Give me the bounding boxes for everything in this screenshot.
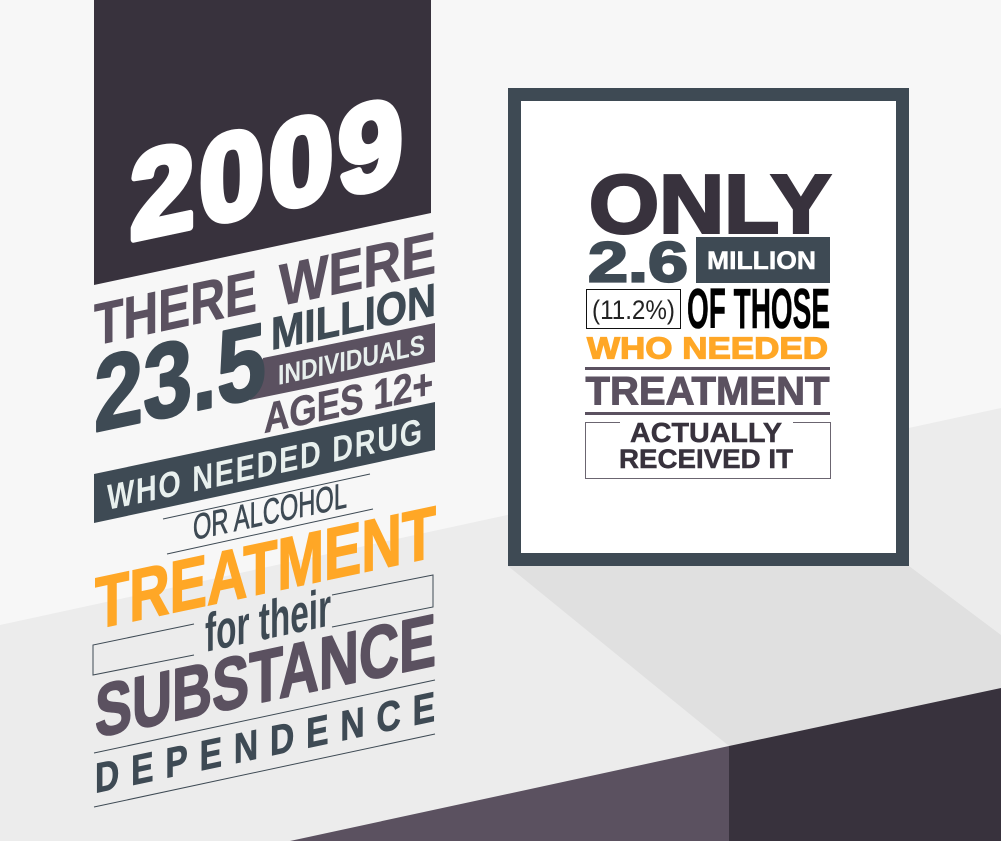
23.5 figure: 23.5 <box>94 300 266 455</box>
or alcohol: OR ALCOHOL <box>193 475 347 548</box>
individuals band <box>250 323 435 400</box>
dependence rules <box>94 680 435 807</box>
background: lower floor <box>0 408 1001 841</box>
for their outline box <box>93 575 433 675</box>
only: ONLY <box>589 158 831 250</box>
dark banner <box>94 0 431 285</box>
or alcohol rules <box>163 474 373 554</box>
there: THERE <box>94 257 257 358</box>
who needed drug band <box>94 402 435 523</box>
actually: ACTUALLY <box>630 417 782 448</box>
were: WERE <box>279 219 436 319</box>
for their: for their <box>205 577 331 664</box>
floor block: purple <box>290 746 729 841</box>
2.6: 2.6 <box>588 230 688 294</box>
frame <box>514 94 902 560</box>
individuals: INDIVIDUALS <box>278 328 425 391</box>
actually received box <box>586 422 830 478</box>
right panel: framed statistic <box>514 94 902 560</box>
substance: SUBSTANCE <box>95 598 436 753</box>
left panel: 2009 statistic <box>93 0 436 807</box>
million label: MILLION <box>707 247 816 275</box>
treatment: TREATMENT <box>95 490 436 645</box>
frame shadow <box>508 566 1001 746</box>
treatment: TREATMENT <box>586 370 830 414</box>
received it: RECEIVED IT <box>619 444 794 474</box>
who needed drug: WHO NEEDED DRUG <box>107 410 422 518</box>
11.2 percent: (11.2%) <box>592 295 675 325</box>
dependence: DEPENDENCE <box>95 683 435 803</box>
million: MILLION <box>271 273 436 360</box>
who needed: WHO NEEDED <box>587 330 828 366</box>
treatment rules <box>585 368 830 414</box>
million box <box>696 237 830 283</box>
percent box <box>586 290 680 328</box>
ages 12+: AGES 12+ <box>264 359 433 442</box>
floor block: dark <box>729 688 1001 841</box>
year 2009: 2009 <box>130 72 403 266</box>
right panel: framed statistic: OF THOSE <box>687 277 830 341</box>
